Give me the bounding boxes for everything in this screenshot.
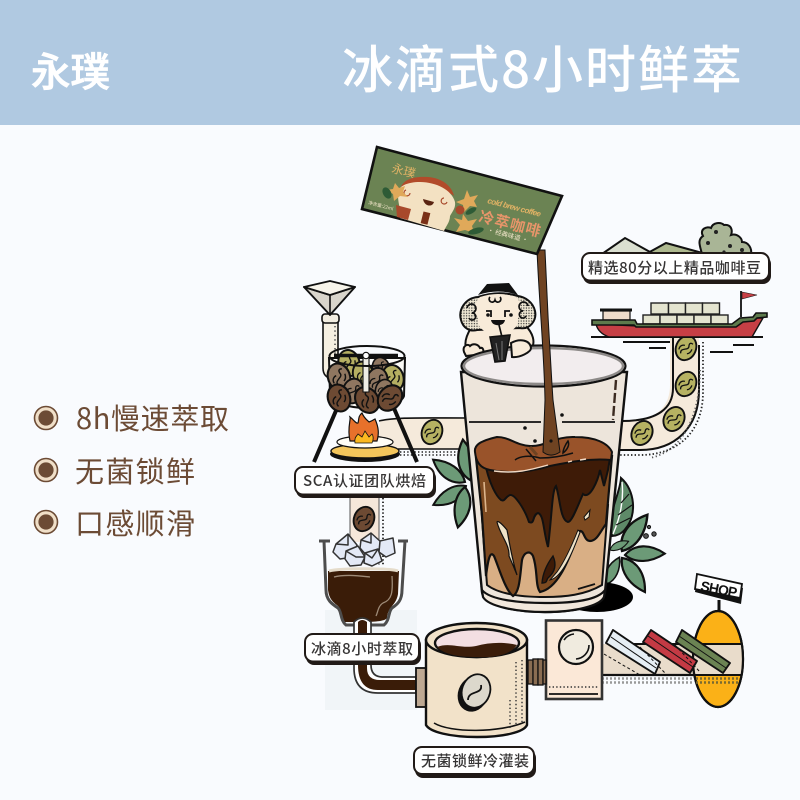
lower coffee pipe	[354, 618, 416, 693]
ice cubes	[333, 533, 395, 566]
bullet 3	[34, 510, 58, 534]
mug bean badge	[453, 670, 495, 716]
feature: smooth taste: 口感顺滑	[75, 501, 195, 543]
flag	[741, 291, 757, 317]
extraction beaker	[319, 533, 408, 625]
flame burner	[330, 413, 400, 462]
filling machine	[546, 620, 602, 699]
label: aseptic filling: 无菌锁鲜冷灌装	[421, 750, 529, 771]
shop capsule	[693, 574, 743, 707]
sachet net content: 净含量:22ml	[367, 199, 395, 213]
cargo ship	[591, 291, 767, 352]
feature list	[34, 396, 229, 543]
dark drip layer	[485, 458, 610, 547]
bullet 1	[34, 406, 58, 430]
sachet flowers	[381, 183, 485, 236]
shop sign: SHOP	[699, 578, 739, 600]
bullet 2	[34, 458, 58, 482]
coffee filling mug	[426, 623, 527, 737]
right bean pipe	[612, 328, 703, 458]
coffee pour stream	[515, 250, 573, 461]
leaves left	[429, 438, 477, 529]
ground shadow	[561, 582, 633, 612]
beans	[324, 348, 407, 418]
mascot cup and hand	[490, 325, 531, 362]
pale panel behind lower pipe	[325, 610, 417, 710]
coffee sachet	[362, 147, 562, 254]
water lines	[591, 337, 763, 352]
label: aseptic filling	[414, 747, 536, 778]
label: cold drip extraction	[305, 634, 421, 665]
coffee liquid	[475, 437, 612, 597]
label: SCA roasting: SCA认证团队烘焙	[303, 470, 426, 491]
label: cold drip extraction: 冰滴8小时萃取	[311, 638, 413, 659]
roasting jar with beans	[324, 346, 407, 418]
title: 冰滴式8小时鲜萃	[342, 29, 742, 103]
product sachets on belt	[604, 630, 730, 675]
highlights	[497, 522, 517, 575]
drinking glass	[461, 346, 627, 612]
header band	[0, 0, 800, 125]
sachet english line: cold brew coffee	[486, 196, 543, 219]
sachet tag: • 经典味道 •	[486, 224, 530, 244]
mascot body	[460, 283, 535, 356]
feature: 8h slow extraction: 8h慢速萃取	[76, 396, 229, 438]
conveyor belt	[602, 644, 742, 682]
feature: sterile freshness: 无菌锁鲜	[75, 449, 195, 491]
glass base	[482, 590, 605, 612]
label: SCA roasting	[295, 467, 436, 498]
bellows connector	[528, 659, 546, 685]
label: selected beans	[582, 253, 771, 284]
coffee swirl layer	[476, 456, 612, 596]
sachet logo: 永璞	[390, 159, 418, 182]
brand logo: 永璞	[31, 40, 110, 98]
left bean pipe	[378, 417, 470, 455]
sachet title: 冷萃咖啡	[477, 206, 543, 242]
sachet mascot	[396, 177, 455, 231]
leaves right	[602, 478, 665, 596]
milk layer	[481, 505, 608, 597]
mug connector	[416, 668, 427, 707]
roaster stand legs	[314, 406, 417, 462]
vertical bean pipe	[350, 490, 383, 565]
foam top	[475, 437, 612, 472]
funnel and feed tube	[304, 281, 355, 378]
label: selected beans: 精选80分以上精品咖啡豆	[588, 257, 761, 278]
mountains and bush	[602, 223, 751, 256]
